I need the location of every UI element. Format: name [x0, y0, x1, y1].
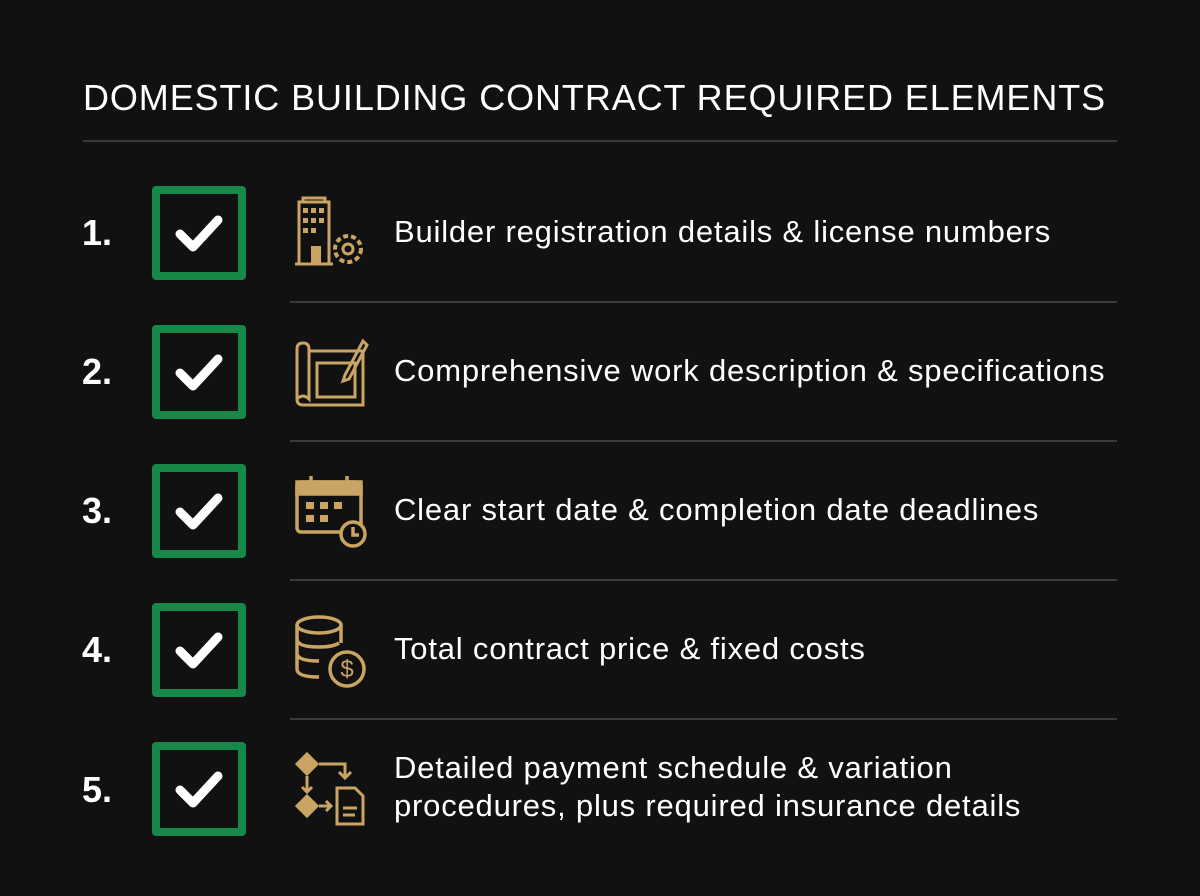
row 1: [82, 186, 1051, 280]
text 5: [394, 750, 1021, 823]
text 5: Detailed payment schedule & variation: [394, 750, 953, 785]
number 3: 3.: [82, 490, 112, 531]
text 1: Builder registration details & license numbers: [394, 214, 1051, 249]
text 4: Total contract price & fixed costs: [394, 631, 866, 666]
title: DOMESTIC BUILDING CONTRACT REQUIRED ELEMENTS: [83, 77, 1106, 118]
checkbox 1: [152, 186, 246, 280]
checkbox 5: [152, 742, 246, 836]
number 4: 4.: [82, 629, 112, 670]
text 2: Comprehensive work description & specifications: [394, 353, 1105, 388]
icon: coins dollar: [295, 615, 366, 688]
row 3: [82, 464, 1039, 558]
text 3: Clear start date & completion date deadlines: [394, 492, 1039, 527]
icon: calendar clock: [295, 476, 367, 548]
icon: flowchart document: [295, 752, 364, 826]
row 5: [82, 742, 1021, 836]
icon: building gear: [295, 196, 363, 266]
number 2: 2.: [82, 351, 112, 392]
checkbox 2: [152, 325, 246, 419]
row 4: [82, 603, 866, 697]
icon: blueprint pencil: [296, 338, 369, 406]
number 5: 5.: [82, 769, 112, 810]
row 2: [82, 325, 1105, 419]
icon: coins dollar: $: [340, 656, 354, 683]
checkbox 4: [152, 603, 246, 697]
number 1: 1.: [82, 212, 112, 253]
text 5: procedures, plus required insurance details: [394, 788, 1021, 823]
checkbox 3: [152, 464, 246, 558]
